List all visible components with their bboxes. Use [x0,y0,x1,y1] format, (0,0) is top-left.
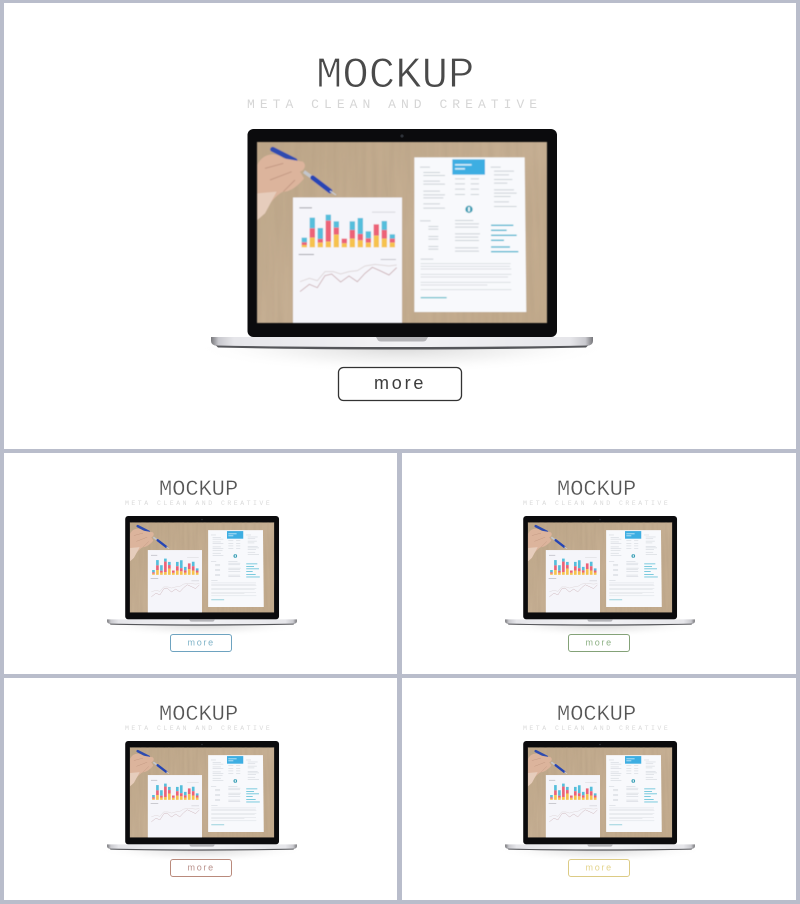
title: red slide: MOCKUP [159,702,238,727]
button: blue more [170,634,232,652]
bar chart [299,207,395,247]
wood desk [257,142,547,323]
button: red more: more [188,862,215,872]
title: main: MOCKUP [316,51,474,101]
panel: green slide [402,453,796,674]
button: blue more: more [188,638,215,648]
webcam [400,134,404,138]
subtitle: blue slide: META CLEAN AND CREATIVE [125,500,272,507]
line chart [299,254,397,292]
resume badge [465,206,473,213]
title: blue slide: MOCKUP [159,477,238,502]
title: green slide: MOCKUP [557,477,636,502]
laptop: blue slide [97,516,307,637]
resume signature [421,297,447,298]
screen photo [257,142,547,323]
paper: charts [293,198,402,323]
paper: resume [414,157,526,312]
laptop shadow [190,347,614,373]
subtitle: yellow slide: META CLEAN AND CREATIVE [523,725,670,732]
button: main more: more [374,373,426,393]
laptop base [211,337,593,350]
laptop: main [190,129,614,373]
button: yellow more: more [586,862,613,872]
panel: main slide [4,3,796,449]
resume header [452,159,485,175]
subtitle: green slide: META CLEAN AND CREATIVE [523,500,670,507]
panel: red slide [4,678,397,900]
panel: blue slide [4,453,397,674]
subtitle: main: META CLEAN AND CREATIVE [247,97,542,112]
button: yellow more [568,860,630,876]
hand and pen [257,149,336,220]
resume text [420,167,517,290]
button: green more: more [586,638,613,648]
panel: yellow slide [402,678,796,900]
resume skill bars [491,225,518,252]
button: main more [338,368,462,400]
laptop: yellow slide [495,741,705,862]
button: green more [568,634,630,652]
laptop: green slide [495,516,705,637]
laptop bezel [248,129,557,337]
title: yellow slide: MOCKUP [557,702,636,727]
laptop: red slide [97,741,307,862]
button: red more [170,860,232,876]
subtitle: red slide: META CLEAN AND CREATIVE [125,725,272,732]
